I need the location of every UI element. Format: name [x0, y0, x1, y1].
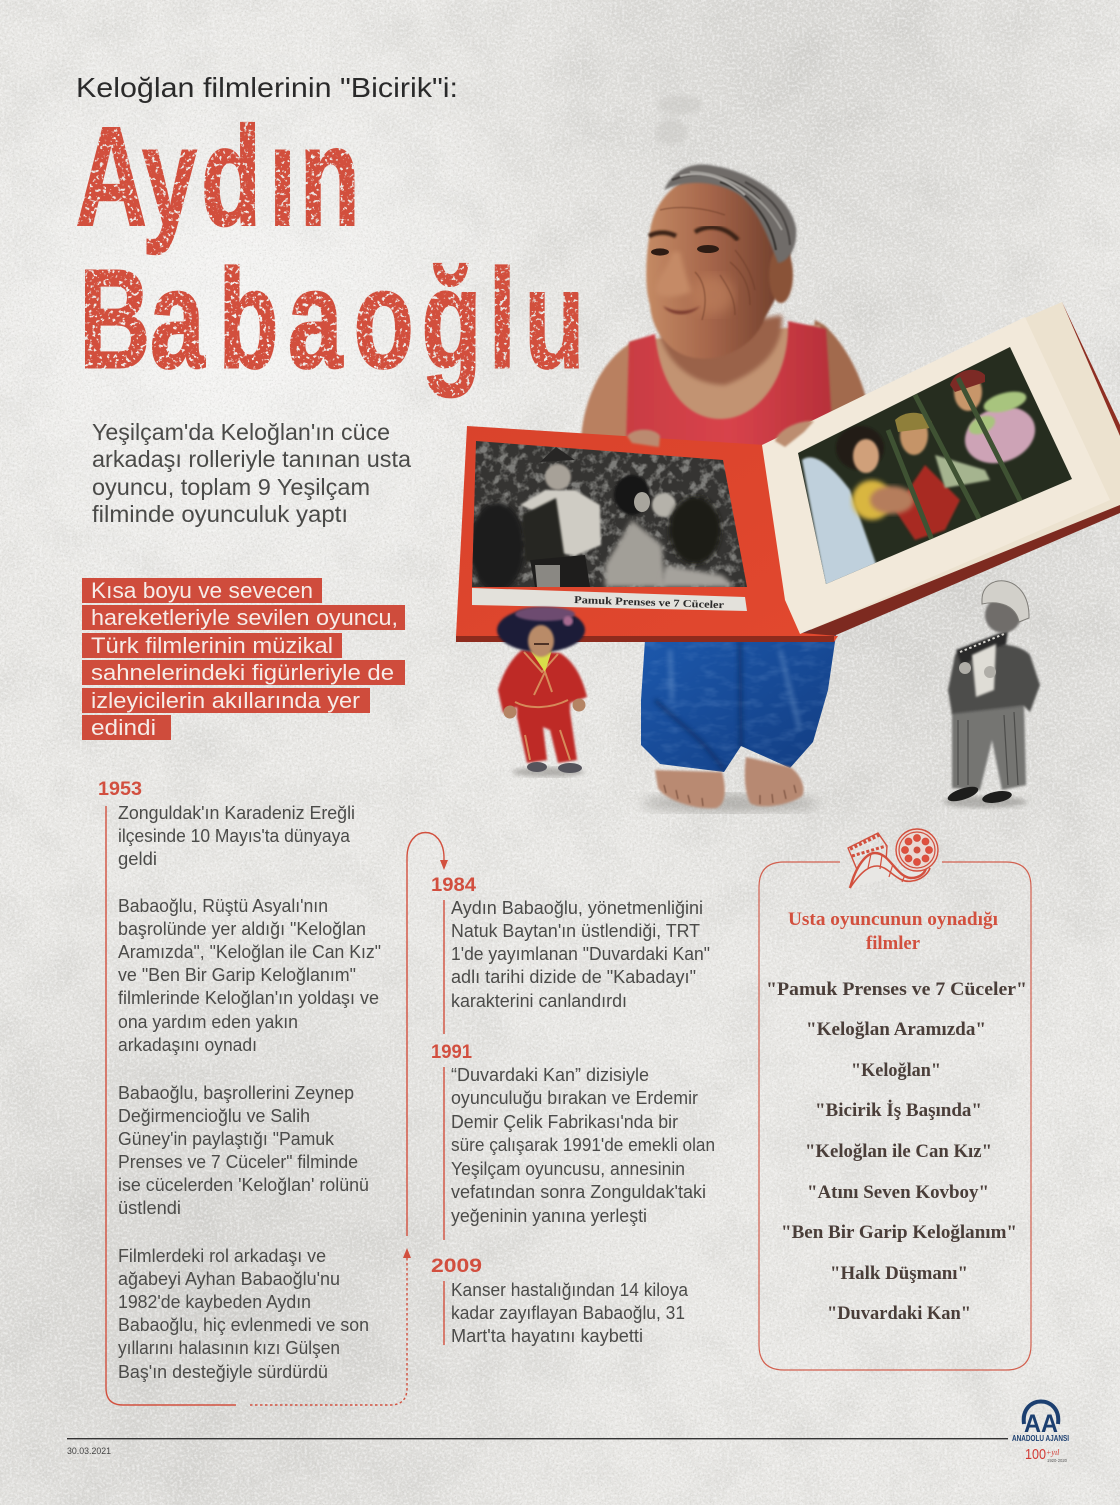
intro text: oyuncu, toplam 9 Yeşilçam	[92, 474, 370, 500]
intro text: arkadaşı rolleriyle tanınan usta	[92, 446, 411, 472]
timeline column 2: 2009: kadar zayıflayan Babaoğlu, 31	[451, 1303, 685, 1323]
timeline column 2: 1984: Aydın Babaoğlu, yönetmenliğini	[451, 898, 703, 918]
timeline column 1: 1953	[98, 778, 381, 1382]
scarf	[956, 630, 1008, 667]
timeline column 1: 1953: başrolünde yer aldığı "Keloğlan	[118, 919, 366, 939]
timeline column 2: 1984: 1'de yayımlanan "Duvardaki Kan"	[451, 944, 710, 964]
timeline column 1: 1953: Babaoğlu, Rüştü Asyalı'nın	[118, 896, 328, 916]
panel frame	[759, 862, 1031, 1370]
timeline column 1: 1953: ona yardım eden yakın	[118, 1012, 298, 1032]
timeline column 2: 1984: Natuk Baytan'ın üstlendiği, TRT	[451, 921, 700, 941]
timeline column 1: 1953: ağabeyi Ayhan Babaoğlu'nu	[118, 1269, 340, 1289]
timeline column 1: 1953: yıllarını halasının kızı Gülşen	[118, 1338, 340, 1358]
highlighted callout: hareketleriyle sevilen oyuncu,	[91, 605, 398, 630]
timeline column 2: 1991: 1991	[431, 1041, 472, 1063]
logo: Anadolu Ajansı: 1920-2020	[1047, 1458, 1067, 1463]
timeline column 1: 1953: filmlerinde Keloğlan'ın yoldaşı ve	[118, 988, 379, 1008]
timeline column 2: 1991: süre çalışarak 1991'de emekli olan	[451, 1135, 715, 1155]
highlighted callout: sahnelerindeki figürleriyle de	[91, 660, 394, 685]
helmet	[982, 581, 1029, 622]
timeline column 2: 1991: “Duvardaki Kan” dizisiyle	[451, 1065, 649, 1085]
cheek	[690, 275, 734, 315]
highlighted callout	[82, 578, 405, 740]
hands	[627, 430, 660, 447]
subtitle: Keloğlan filmlerinin "Bicirik"i:	[76, 72, 458, 103]
hat	[497, 608, 585, 652]
head	[646, 164, 796, 359]
highlighted callout: Türk filmlerinin müzikal	[91, 633, 333, 658]
logo: Anadolu Ajansı	[1012, 1402, 1069, 1463]
timeline column 1: 1953: 1982'de kaybeden Aydın	[118, 1292, 311, 1312]
timeline column 2: 1991: yeğeninin yanına yerleşti	[451, 1206, 647, 1226]
title line 1: Aydın	[76, 98, 360, 255]
highlighted callout: edindi	[91, 715, 156, 740]
costume	[498, 650, 587, 763]
timeline column 2: 2009	[431, 1255, 689, 1346]
film titles: "Keloğlan Aramızda"	[806, 1019, 986, 1040]
title line 2: Babaoğlu	[79, 240, 585, 398]
timeline column 2: 1991: oyunculuğu bırakan ve Erdemir	[451, 1088, 698, 1108]
wrinkles	[660, 208, 755, 320]
neck	[660, 315, 782, 385]
head	[985, 597, 1021, 633]
dotted arrow line	[250, 1258, 407, 1405]
icon: film reel and clapper	[848, 829, 938, 888]
footer rule	[67, 1438, 1008, 1439]
connector arc to second column	[407, 832, 444, 1236]
arrow head up	[403, 1248, 411, 1258]
album right page	[762, 317, 1110, 634]
intro text: Yeşilçam'da Keloğlan'ın cüce	[92, 419, 390, 445]
poster caption strip: Pamuk Prenses ve 7 Cüceler	[574, 595, 725, 611]
timeline column 2: 1984: adlı tarihi dizide de "Kabadayı"	[451, 967, 696, 987]
jeans	[635, 625, 840, 775]
timeline column 2: 1991: Demir Çelik Fabrikası'nda bir	[451, 1112, 678, 1132]
timeline column 1: 1953: Babaoğlu, başrollerini Zeynep	[118, 1083, 354, 1103]
film titles	[766, 979, 1027, 1324]
title: Aydın Babaoğlu	[76, 98, 585, 398]
film titles: "Atını Seven Kovboy"	[807, 1182, 989, 1203]
timeline column 1: 1953: Güney'in paylaştığı "Pamuk	[118, 1129, 335, 1149]
timeline column 1: 1953: 1953	[98, 778, 142, 800]
timeline column 1: 1953: ve "Ben Bir Garip Keloğlanım"	[118, 965, 356, 985]
colour film still	[798, 347, 1072, 584]
panel: films list	[759, 829, 1031, 1370]
timeline column 2: 1991: vefatından sonra Zonguldak'taki	[451, 1182, 706, 1202]
intro text	[92, 419, 411, 527]
timeline column 1: 1953: Değirmencioğlu ve Salih	[118, 1106, 310, 1126]
nose	[656, 252, 692, 297]
timeline column 1: 1953: ise cücelerden 'Keloğlan' rolünü	[118, 1175, 369, 1195]
film titles: "Pamuk Prenses ve 7 Cüceler"	[766, 979, 1027, 1000]
timeline column 2: 1991	[431, 1041, 715, 1226]
photo: actor holding album	[456, 164, 1120, 812]
logo: Anadolu Ajansı: ANADOLU AJANSI	[1012, 1434, 1069, 1443]
timeline column 2: 2009: Kanser hastalığından 14 kiloya	[451, 1280, 689, 1300]
mouth	[663, 306, 700, 314]
arms	[581, 320, 866, 440]
arrow head down	[440, 860, 448, 870]
film titles: "Duvardaki Kan"	[827, 1303, 971, 1324]
timeline column 2: 2009: 2009	[431, 1255, 482, 1277]
timeline column 1: 1953: üstlendi	[118, 1198, 181, 1218]
timeline column 1: 1953: geldi	[118, 849, 157, 869]
album left page	[456, 426, 838, 642]
jacket	[948, 644, 1040, 714]
intro text: filminde oyunculuk yaptı	[92, 501, 348, 527]
panel heading: Usta oyuncunun oynadığı	[788, 909, 998, 930]
timeline column 1: 1953: Babaoğlu, hiç evlenmedi ve son	[118, 1315, 369, 1335]
logo: Anadolu Ajansı: +yıl	[1046, 1448, 1060, 1457]
timeline column 2: 1984	[431, 874, 710, 1011]
photo: small figure in red costume	[497, 607, 587, 777]
timeline column 1: 1953: arkadaşını oynadı	[118, 1035, 257, 1055]
panel: films list: filmler	[866, 933, 921, 954]
poster caption strip	[472, 588, 747, 611]
brows and eyes	[649, 227, 738, 240]
highlighted callout: Kısa boyu ve sevecen	[91, 578, 313, 603]
shoes	[946, 784, 980, 804]
shirt	[972, 644, 996, 697]
timeline connector left column	[106, 806, 448, 1405]
black and white film still	[472, 441, 747, 587]
tank top	[626, 321, 832, 452]
section rules second column	[443, 900, 445, 1345]
photo: small figure in grey suit	[943, 581, 1040, 808]
feet	[655, 757, 804, 808]
trousers	[952, 705, 1026, 790]
timeline column 2: 1984: 1984	[431, 874, 476, 896]
film titles: "Bicirik İş Başında"	[815, 1100, 982, 1121]
highlighted callout: izleyicilerin akıllarında yer	[91, 688, 360, 713]
film titles: "Ben Bir Garip Keloğlanım"	[781, 1222, 1017, 1243]
timeline column 1: 1953: ilçesinde 10 Mayıs'ta dünyaya	[118, 826, 351, 846]
floor shadow	[640, 794, 820, 812]
film titles: "Halk Düşmanı"	[830, 1263, 968, 1284]
timeline column 1: 1953: Filmlerdeki rol arkadaşı ve	[118, 1246, 326, 1266]
film titles: "Keloğlan ile Can Kız"	[805, 1141, 992, 1162]
film titles: "Keloğlan"	[851, 1060, 941, 1081]
ear	[769, 247, 793, 303]
timeline column 2: 1991: Yeşilçam oyuncusu, annesinin	[451, 1159, 685, 1179]
timeline column 1: 1953: Aramızda", "Keloğlan ile Can Kız"	[118, 942, 381, 962]
timeline column 2: 2009: Mart'ta hayatını kaybetti	[451, 1326, 643, 1346]
hair	[664, 164, 796, 263]
timeline column 1: 1953: Baş'ın desteğiyle sürdürdü	[118, 1362, 328, 1382]
timeline column 1: 1953: Prenses ve 7 Cüceler" filminde	[118, 1152, 358, 1172]
date: 30.03.2021	[67, 1446, 111, 1456]
timeline column 1: 1953: Zonguldak'ın Karadeniz Ereğli	[118, 803, 355, 823]
logo: Anadolu Ajansı: 100	[1025, 1446, 1046, 1463]
album back cover	[780, 302, 1120, 634]
logo: Anadolu Ajansı: AA	[1024, 1410, 1058, 1438]
timeline column 2: 1984: karakterini canlandırdı	[451, 991, 627, 1011]
